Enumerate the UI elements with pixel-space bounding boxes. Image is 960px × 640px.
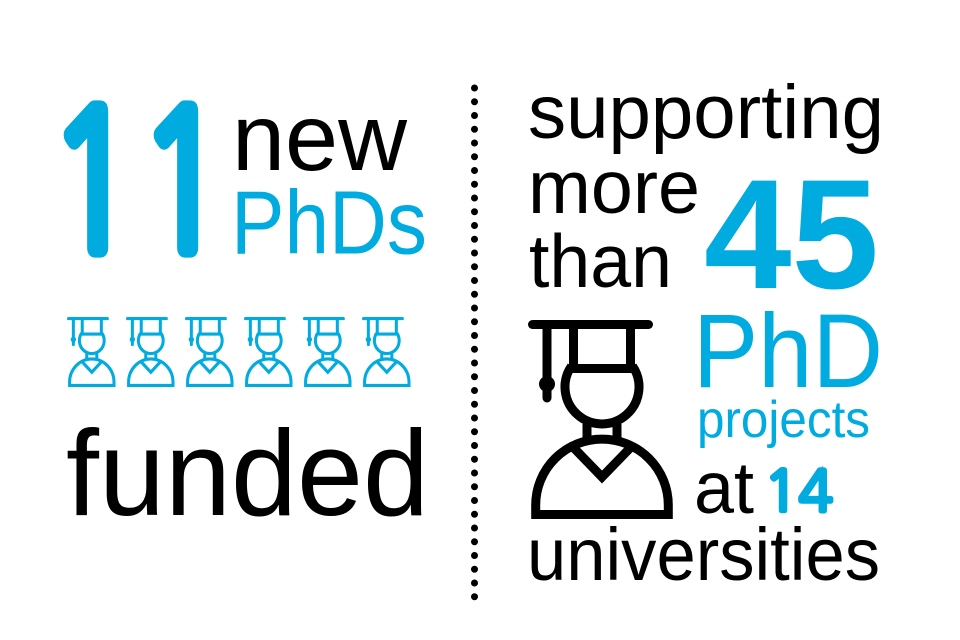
text: than: than (529, 219, 672, 303)
icon: graduate 6 (364, 319, 409, 385)
icon: graduate 2 (128, 319, 173, 385)
big number: 11: 11 (48, 86, 228, 278)
text: funded: funded (66, 405, 429, 541)
icon: graduate 4 (246, 319, 291, 385)
icon: large graduate (532, 324, 668, 514)
heading: PhDs: PhDs (231, 174, 427, 274)
text: projects: projects (697, 391, 870, 449)
icon: graduate 5 (305, 319, 350, 385)
icon: graduate 1 (69, 319, 114, 385)
text: PhD: PhD (693, 293, 883, 410)
big number: 45: 45 (704, 148, 879, 322)
text: universities: universities (527, 513, 880, 596)
text: supporting: supporting (528, 70, 884, 155)
dotted divider (471, 88, 478, 597)
icon: graduate 3 (187, 319, 232, 385)
row of six graduate icons (69, 319, 409, 385)
heading: new: new (232, 85, 407, 191)
text: at: at (694, 448, 754, 529)
number: 14: 14 (764, 464, 833, 520)
text: more: more (528, 145, 700, 229)
